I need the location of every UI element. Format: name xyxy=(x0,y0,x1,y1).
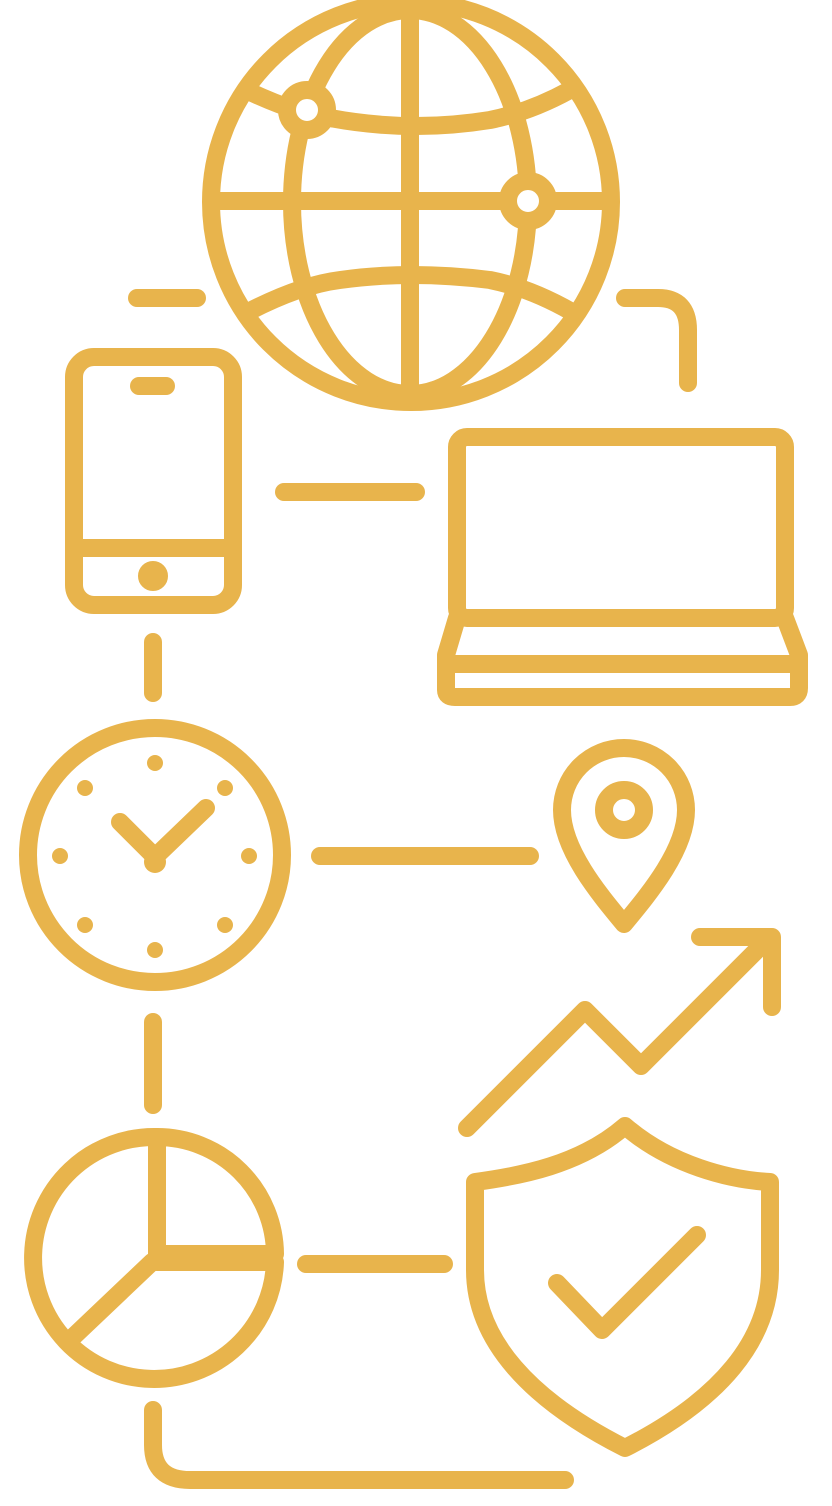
connector: globe right xyxy=(625,298,688,383)
connector: globe left xyxy=(137,289,197,307)
connector: phone to clock xyxy=(144,642,162,693)
connector: clock to pin xyxy=(320,847,530,865)
connector: pie to shield xyxy=(306,1255,444,1273)
icon: laptop xyxy=(446,437,799,697)
connector: clock to pie xyxy=(144,1022,162,1105)
icon: pie chart xyxy=(33,1137,275,1379)
icon: shield with check xyxy=(475,1126,770,1448)
icon: smartphone xyxy=(74,357,233,605)
icon: trend arrow xyxy=(467,937,772,1128)
connector: bottom xyxy=(153,1410,565,1480)
icon: clock xyxy=(28,728,282,982)
connector: phone to laptop xyxy=(284,483,416,501)
icon: globe xyxy=(211,2,611,402)
icon: location pin xyxy=(562,748,686,924)
